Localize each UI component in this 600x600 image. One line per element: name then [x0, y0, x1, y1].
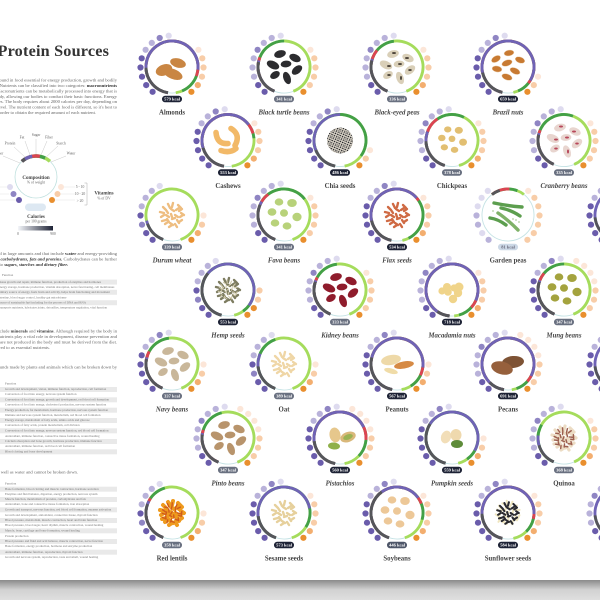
food: red lentils — [158, 499, 186, 527]
food: oat — [272, 352, 296, 376]
vitamins table: Conversion of food into energy, growth and development, red blood cell formation — [5, 398, 109, 402]
card: Sesame seeds — [249, 479, 319, 562]
card: Fava beans — [249, 181, 319, 264]
card: Kidney beans — [305, 256, 375, 340]
card: Pinto beans — [193, 404, 263, 488]
name: Durum wheat — [152, 258, 192, 264]
ring — [420, 406, 484, 470]
composition labels: Starch — [56, 142, 66, 146]
composition arc — [6, 147, 66, 207]
dots — [362, 181, 432, 243]
ring — [530, 404, 598, 472]
name: Sesame seeds — [265, 556, 304, 562]
vitamins table: Immune and nervous system function, metabolism, red blood cell formation — [5, 413, 101, 418]
dots — [249, 479, 319, 541]
name: Pumpkin seeds — [431, 480, 473, 488]
vitamins key dots — [49, 184, 85, 203]
name: Red lentils — [157, 556, 188, 562]
vitamins table: Energy storage, metabolism of fatty acids, amino acids and glucose — [5, 418, 90, 423]
name: Cashews — [215, 183, 241, 190]
kcal pill: 368 kcal — [556, 468, 573, 473]
minerals table — [0, 481, 117, 560]
dots — [305, 256, 375, 318]
name: Almonds — [159, 110, 185, 116]
ring — [366, 184, 428, 246]
vitamins label — [94, 192, 114, 200]
bracket — [84, 183, 87, 205]
card: Brazil nuts — [473, 33, 541, 116]
dots — [529, 404, 599, 466]
name: Chia seeds — [325, 183, 356, 190]
dots — [362, 33, 432, 95]
kcal pill: 378 kcal — [444, 170, 461, 175]
composition labels: Sugar — [32, 133, 41, 137]
composition labels: Fat — [20, 136, 24, 140]
ring — [530, 106, 598, 175]
minerals table: Bone formation, blood clotting and muscle contraction, hormone secretion — [5, 487, 99, 492]
name: Navy beans — [155, 406, 188, 414]
vitamins table: Function — [5, 381, 17, 385]
kcal pill: 347 kcal — [556, 320, 573, 325]
card: Hemp seeds — [193, 258, 263, 340]
name: Peanuts — [385, 406, 409, 414]
kcal pill: 573 kcal — [276, 543, 293, 548]
minerals table: Blood pressure, blood sugar, heart rhythm, muscle contraction, wound healing — [5, 523, 104, 528]
kcal pill: 560 kcal — [332, 468, 349, 473]
card: clipped right edge row 3 — [586, 181, 600, 246]
minerals table: Bone formation, energy production, hormone and enzyme production — [5, 544, 93, 549]
food: chia seeds — [327, 128, 353, 154]
food: cranberry beans — [545, 122, 584, 159]
food: black beans — [265, 49, 304, 85]
card: Garden peas — [471, 178, 545, 264]
ring — [251, 182, 317, 248]
kcal pill: 486 kcal — [332, 170, 349, 175]
kcal pill: 567 kcal — [389, 394, 406, 399]
legend: composition wheel: % of weight — [27, 181, 45, 185]
name: Soybeans — [383, 556, 411, 562]
card: Mung beans — [529, 256, 599, 340]
vitamins table: Calcium absorption and bone growth, hormone production, immune function — [5, 439, 102, 444]
food: flax seeds — [385, 203, 409, 227]
kcal pill: 553 kcal — [220, 170, 237, 175]
dots — [193, 258, 263, 318]
minerals table: Muscle function, metabolism of proteins, carbohydrates and fats — [5, 497, 87, 502]
ring — [310, 408, 370, 468]
name: Chickpeas — [437, 183, 467, 190]
ring — [196, 258, 260, 322]
vitamins label: % of DV — [97, 196, 111, 200]
kcal pill: 446 kcal — [389, 543, 406, 548]
macronutrient table: Source of sustainable fuel including for the process of DNA and RNA — [0, 301, 87, 305]
minerals key dots — [0, 184, 22, 203]
dots — [362, 330, 432, 392]
kcal pill: 339 kcal — [164, 245, 181, 250]
macronutrient table: Transports nutrients, lubricates joints, detoxifies, temperature regulation, vital function — [0, 306, 108, 311]
macronutrient table: Primary source of energy, fuels brain and activity, helps brain functioning and movement — [0, 290, 110, 295]
food: garden peas — [490, 203, 522, 230]
kcal pill: 659 kcal — [500, 97, 517, 102]
name: Kidney beans — [320, 332, 359, 340]
ring — [139, 480, 205, 546]
card: Soybeans — [362, 479, 432, 562]
vitamins table: Conversion of food into energy, cholesterol production, nervous system function — [5, 402, 107, 408]
kcal pill: 584 kcal — [500, 543, 517, 548]
kcal pill: 335 kcal — [556, 170, 573, 175]
intro text block — [0, 78, 118, 115]
minerals table: Blood pressure and fluid and acid balance, muscle contraction, nerve function — [5, 539, 103, 544]
ring — [424, 262, 480, 318]
name: Quinoa — [553, 480, 575, 488]
food: brazil nuts — [490, 49, 526, 82]
name: Black turtle beans — [258, 110, 310, 116]
food: almonds — [154, 56, 187, 82]
composition labels: Protein — [5, 142, 15, 146]
card: Macadamia nuts — [417, 256, 487, 340]
vitamins table — [0, 381, 117, 454]
dots — [137, 330, 207, 392]
dots — [417, 256, 487, 318]
poster bottom shadow — [0, 580, 600, 600]
composition labels — [0, 133, 76, 156]
minerals table: Protein production — [5, 534, 29, 538]
ring — [306, 256, 374, 324]
kcal pill: 333 kcal — [332, 320, 349, 325]
dots — [249, 33, 319, 95]
minerals table: Growth and development, antioxidant, connective tissue, thyroid function — [5, 513, 98, 518]
minerals table: Muscle, bone, cartilage and bone formation, wound healing — [5, 528, 80, 534]
ring — [590, 333, 600, 395]
dots — [137, 481, 207, 541]
minerals table: Function — [5, 481, 17, 485]
food: pinto beans — [209, 420, 248, 456]
ring — [363, 33, 431, 101]
macronutrient table: Intestine, blood sugar control, healthy gut microbiome — [0, 295, 67, 300]
vitamins key dots: > 20 — [77, 199, 83, 203]
card: Chickpeas — [417, 106, 487, 190]
dots — [417, 106, 487, 168]
card: Flax seeds — [362, 181, 432, 264]
kcal pill: 553 kcal — [220, 320, 237, 325]
composition caption: Composition — [22, 176, 50, 181]
name: Hemp seeds — [210, 332, 245, 340]
minerals table: Antioxidant, immune function, reproduction, thyroid function — [5, 550, 83, 555]
name: Cranberry beans — [540, 183, 588, 190]
kcal pill: 347 kcal — [220, 468, 237, 473]
food: durum wheat — [160, 203, 184, 227]
composition outer circle — [15, 156, 57, 198]
card: Pistachios — [305, 404, 375, 488]
macronutrient table — [0, 273, 117, 311]
dots — [529, 256, 599, 318]
kcal pill: 81 kcal — [501, 245, 516, 250]
ring — [478, 334, 538, 394]
dots — [305, 106, 373, 168]
food: sunflower seeds — [493, 498, 523, 528]
dots — [249, 181, 319, 243]
dots — [137, 33, 207, 95]
name: Black-eyed peas — [373, 110, 420, 116]
food: navy beans — [153, 346, 192, 382]
ring — [530, 256, 598, 324]
macronutrient table: Tissue growth and repair, immune function, production of enzymes and hormones — [0, 280, 102, 285]
name: Pistachios — [326, 480, 355, 488]
ring — [251, 480, 317, 546]
composition labels: Fiber — [45, 136, 54, 140]
dots — [417, 404, 487, 466]
macronutrients text block — [0, 251, 118, 267]
name: Pecans — [498, 406, 518, 414]
food: black-eyed peas — [378, 49, 417, 85]
calories pill legend — [25, 204, 46, 211]
kcal pill: 534 kcal — [389, 245, 406, 250]
ring — [364, 480, 430, 546]
kcal pill: 389 kcal — [276, 394, 293, 399]
minerals table: Enzymes and fluid balance, digestion, energy production, nervous system — [5, 492, 98, 497]
dots — [586, 479, 600, 541]
kcal pill: 718 kcal — [444, 320, 461, 325]
dots — [362, 479, 432, 541]
vitamins table: Conversion of food into energy, nervous system function — [5, 392, 77, 397]
minerals table: Growth and transport, nervous function, red blood cell formation, enzyme activation — [5, 508, 112, 512]
ring — [367, 334, 427, 394]
dots — [586, 330, 600, 392]
food: chickpeas — [438, 126, 467, 153]
kcal pill: 337 kcal — [164, 394, 181, 399]
dots — [586, 181, 600, 243]
leader lines — [3, 139, 66, 163]
dots — [193, 106, 263, 168]
name: Brazil nuts — [492, 110, 524, 116]
name: Macadamia nuts — [427, 332, 476, 340]
card: Almonds — [137, 33, 207, 116]
minerals table: Growth and nervous system, reproduction, taste and smell, wound healing — [5, 555, 99, 560]
micronutrients text block — [0, 328, 118, 350]
macronutrient table: Energy storage, hormone production, vitamin absorption, nerve functioning, cell membranes — [0, 285, 115, 290]
food: macadamia nuts — [438, 282, 464, 303]
vitamins table: Energy production, fat metabolism, hormone production, nervous system function — [5, 408, 109, 413]
dots — [249, 332, 319, 392]
food: quinoa — [550, 424, 578, 452]
food: hemp seeds — [216, 278, 240, 302]
vitamins table: Antioxidant, immune function, connective tissue formation, wound healing — [5, 434, 100, 439]
composition labels: Water — [67, 152, 76, 156]
food: mung beans — [548, 273, 582, 305]
vitamins key dots: 10 - 20 — [75, 192, 85, 196]
card: Chia seeds — [305, 106, 373, 190]
ring — [194, 404, 262, 472]
ring — [138, 330, 206, 398]
food: pistachios — [328, 427, 357, 450]
card: Peanuts — [362, 330, 432, 414]
calories gradient scale: 0 — [17, 232, 19, 236]
kcal pill: 341 kcal — [276, 97, 293, 102]
card: Black turtle beans — [249, 33, 319, 116]
card: Cashews — [193, 106, 263, 190]
dots — [473, 188, 543, 243]
food: cashews — [216, 128, 237, 152]
dots — [305, 404, 375, 466]
card: Oat — [249, 331, 319, 414]
dots — [529, 106, 599, 168]
dots — [193, 404, 263, 466]
kcal pill: 691 kcal — [500, 394, 517, 399]
ring — [139, 182, 205, 248]
dots — [137, 183, 207, 243]
food: peanuts — [380, 353, 414, 375]
card: Quinoa — [529, 404, 599, 488]
food: sesame seeds — [272, 501, 296, 525]
vitamins label: Vitamins — [94, 192, 114, 196]
ring — [471, 178, 545, 252]
dots — [473, 33, 541, 95]
name: Flax seeds — [382, 258, 412, 264]
ring — [251, 331, 317, 397]
name: Mung beans — [546, 332, 582, 340]
card: Durum wheat — [137, 182, 207, 264]
ring — [250, 33, 318, 101]
food: pecans — [490, 355, 524, 377]
ring — [590, 482, 600, 544]
vitamins table: Growth and development, vision, immune function, reproduction, cell formation — [5, 387, 107, 392]
name: Oat — [279, 406, 290, 414]
ring — [477, 482, 539, 544]
name: Fava beans — [268, 258, 300, 264]
kcal pill: 358 kcal — [164, 543, 181, 548]
ring — [420, 108, 484, 173]
card: Cranberry beans — [529, 106, 599, 190]
card: Red lentils — [137, 480, 207, 562]
food: kidney beans — [321, 272, 360, 308]
ring — [310, 110, 370, 171]
dots — [473, 479, 543, 541]
minerals table: Antioxidant, bone and connective tissue formation, iron absorption — [5, 502, 90, 507]
calories label: Calories — [27, 215, 45, 220]
card: Sunflower seeds — [473, 479, 543, 562]
dots — [473, 330, 543, 392]
calories gradient scale: 900 — [50, 232, 56, 236]
card: clipped right edge row 5 — [586, 330, 600, 395]
vitamins table: Conversion of food into energy, nervous system function, red blood cell formation — [5, 428, 109, 434]
ring — [477, 36, 539, 98]
ring — [142, 37, 202, 97]
calories gradient scale — [17, 226, 56, 236]
legend: composition wheel — [0, 133, 114, 236]
ring — [198, 111, 258, 170]
vitamins table: Antioxidant, immune function, red blood cell formation — [5, 444, 76, 449]
calories label — [25, 215, 47, 224]
card: Black-eyed peas — [362, 33, 432, 116]
minerals table: Blood pressure, metabolism, muscle contraction, heart and brain function — [5, 518, 98, 523]
kcal pill: 336 kcal — [389, 97, 406, 102]
name: Garden peas — [490, 258, 527, 264]
calories label: per 100 grams — [25, 220, 47, 224]
card: Pumpkin seeds — [417, 404, 487, 488]
title: Protein Sources — [0, 42, 109, 60]
name: Sunflower seeds — [485, 556, 532, 562]
vitamins table: Conversion of fatty acids, protein metabolism, cell division — [5, 423, 80, 428]
vitamins key dots: 5 - 10 — [76, 185, 84, 189]
vitamins table: Blood clotting and bone development — [5, 450, 52, 454]
kcal pill: 341 kcal — [276, 245, 293, 250]
food: pumpkin seeds — [439, 429, 463, 448]
kcal pill: 559 kcal — [444, 468, 461, 473]
card: Pecans — [473, 330, 543, 414]
kcal pill: 579 kcal — [164, 97, 181, 102]
ring — [590, 184, 600, 246]
name: Pinto beans — [211, 480, 245, 488]
card: clipped right edge row 7 — [586, 479, 600, 544]
food: fava beans — [268, 198, 302, 230]
food: soybeans — [381, 496, 415, 528]
macronutrient table: Function — [2, 273, 14, 277]
card: Navy beans — [137, 330, 207, 414]
